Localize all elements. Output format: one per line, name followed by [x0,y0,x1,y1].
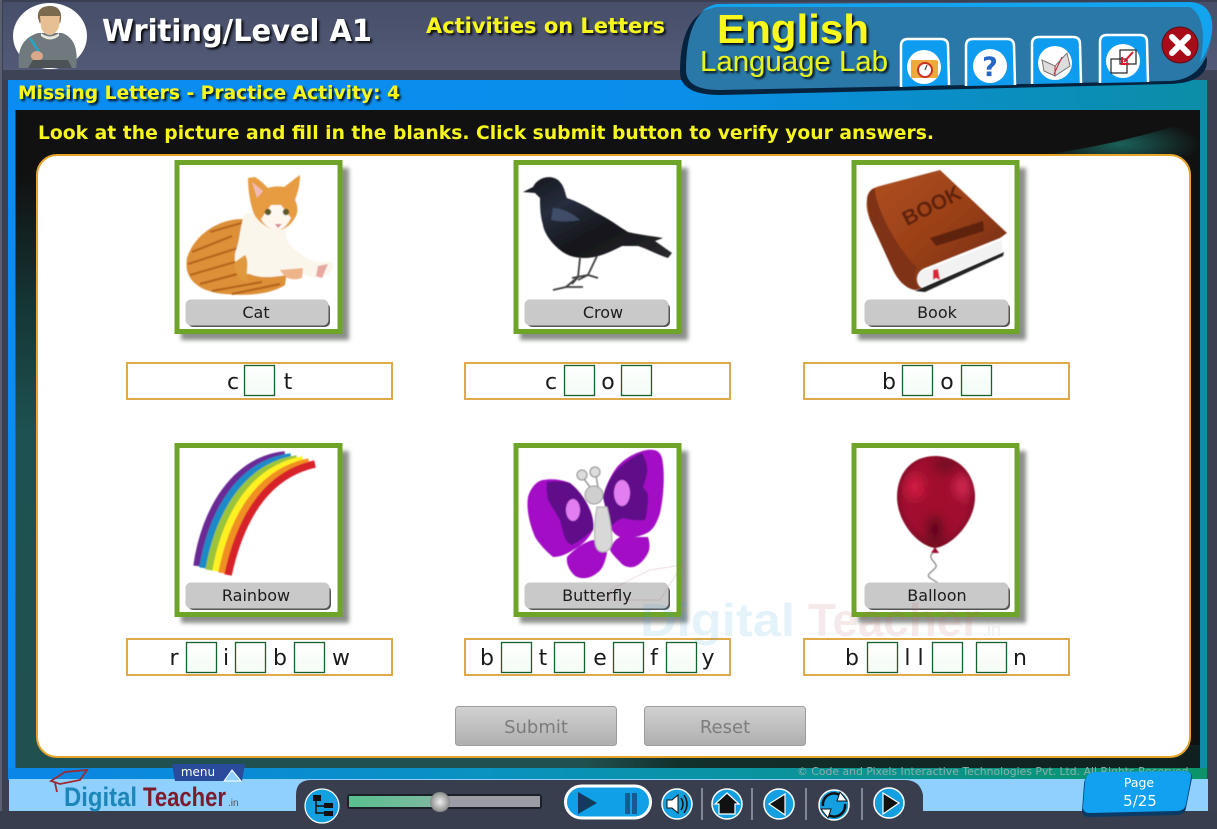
picture: balloon [897,456,975,583]
divider [805,788,807,820]
caption button: Crow [525,300,670,327]
answer row: b_t_e_f_y: e [593,646,607,671]
heading: Missing Letters practice activity: Missing Letters - Practice Activity: 4 [18,82,400,104]
card: crow [516,162,688,340]
caption button: Book: Book [917,303,958,322]
icon: next [874,788,904,818]
icon: resize windows tab [1100,35,1148,83]
answer row: b_t_e_f_y: t [539,646,548,671]
caption button: Cat [186,300,330,327]
logo: Digital Teacher: .in [228,798,239,809]
divider [861,788,863,820]
answer row: r_i_b_w: r [169,646,179,671]
answer row: b_ll__n: n [1013,646,1027,671]
answer row: r_i_b_w: w [332,646,350,671]
caption button: Cat: Cat [242,303,270,322]
icon: timer folder tab [901,39,949,87]
menu tab: menu [181,765,215,779]
button: Submit: Submit [504,717,568,738]
logo: Digital Teacher: Teacher [143,782,226,812]
footer strip [0,779,1217,829]
picture: crow [523,177,672,290]
icon: help tab [966,39,1015,86]
answer row: c_o_: o [601,370,615,395]
card: cat [177,162,349,340]
caption button: Book [865,300,1010,327]
picture: book [867,170,1007,292]
picture: cat [186,175,333,295]
card: balloon [854,446,1026,623]
picture: butterfly [527,450,664,578]
answer row: c_t [127,363,392,399]
answer row: b_t_e_f_y: f [650,646,659,671]
icon: help tab: ? [982,52,998,83]
caption button: Balloon: Balloon [907,586,967,605]
answer row: r_i_b_w [127,639,392,675]
answer row: b_o_: o [940,370,954,395]
button: Reset [644,706,806,746]
answer row: r_i_b_w: b [273,646,287,671]
brand panel: English Language Lab: Language Lab [700,46,888,78]
logo: Digital Teacher: Digital [64,782,137,812]
button: Reset: Reset [700,717,750,738]
divider [701,788,703,820]
icon: student writing avatar [13,3,87,69]
play and pause control [566,786,650,818]
page counter badge [1082,771,1192,817]
card: book [854,162,1026,340]
page counter badge: 5/25 [1123,792,1157,810]
caption button: Balloon [865,583,1010,610]
answer row: r_i_b_w: i [223,646,229,671]
icon: home [712,789,742,819]
copyright text: © Code and Pixels Interactive Technologies Pvt. Ltd. All Rights Reserved. [797,765,1192,778]
watermark: Digital Teacher: .in [982,620,1001,640]
control bar [296,780,923,829]
answer row: c_t: t [284,370,293,395]
answer row: b_ll__n: b [845,646,859,671]
watermark: Digital Teacher: Teacher [808,594,980,646]
icon: speaker [662,789,692,819]
answer row: c_t: c [227,370,239,395]
answer row: b_t_e_f_y: b [480,646,494,671]
watermark: Digital Teacher [610,565,1001,646]
answer row: b_o_: b [882,370,896,395]
icon: refresh [819,790,849,820]
caption button: Rainbow [186,583,331,610]
answer row: b_t_e_f_y: y [701,646,715,671]
menu tab [172,764,245,781]
divider [751,788,753,820]
answer row: b_ll__n [804,639,1069,675]
caption button: Crow: Crow [583,303,623,322]
answer row: c_o_: c [545,370,557,395]
watermark: Digital Teacher: Digital [640,594,795,646]
heading: Activities on Letters: Activities on Letters [426,14,665,38]
icon: close button [1162,27,1198,63]
icon: previous [764,789,794,819]
button: Submit [456,706,616,746]
logo: Digital Teacher [51,770,239,812]
answer row: b_t_e_f_y [465,639,730,675]
picture: book: BOOK [899,182,965,231]
card: rainbow [177,446,349,623]
title: Writing/Level A1: Writing/Level A1 [102,14,372,49]
page counter badge: Page [1124,775,1154,790]
brand panel: English Language Lab [680,2,1212,95]
answer row: b_ll__n: l l [904,646,924,671]
instruction text: Look at the picture and fill in the blanks. Click submit button to verify your answers. [38,122,934,144]
answer row: c_o_ [465,363,730,399]
caption button: Butterfly: Butterfly [562,586,632,605]
icon: open book tab [1032,37,1081,84]
caption button: Butterfly [525,583,670,610]
panel: activity area [37,155,1190,757]
answer row: b_o_ [804,363,1069,399]
progress slider [347,792,542,812]
caption button: Rainbow: Rainbow [222,586,290,605]
card: butterfly [516,446,688,623]
picture: rainbow [197,455,315,575]
brand panel: English Language Lab: English [717,6,869,52]
icon: course tree [305,789,339,823]
